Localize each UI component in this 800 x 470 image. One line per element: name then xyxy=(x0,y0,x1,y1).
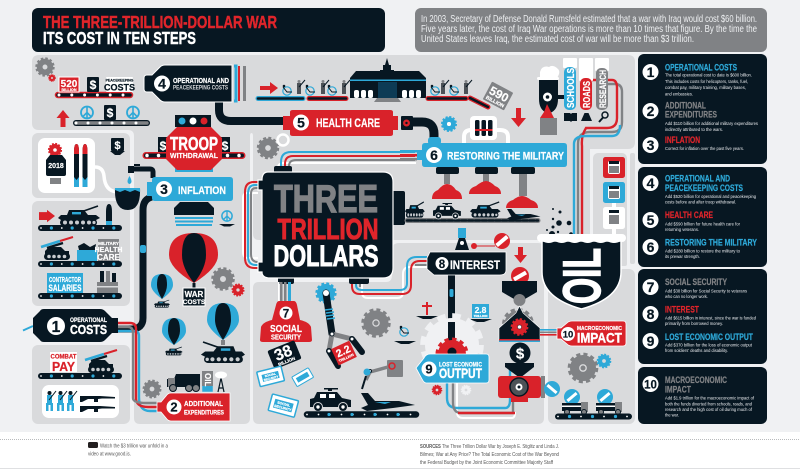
label: step 4 operational and peacekeeping costs: 4 xyxy=(158,76,166,92)
pipes: step 1 to step 2 xyxy=(118,323,160,411)
footer: sources: Bilmes; War at Any Price? The Total Economic Cost of the War Beyond xyxy=(420,452,559,458)
label: step 10 macroeconomic impact xyxy=(557,321,626,346)
label: step 7 social security xyxy=(260,301,312,342)
icon: cross on stand xyxy=(416,302,438,319)
step 8: INTEREST xyxy=(665,304,699,314)
tag: peacekeeping costs: PEACEKEEPING xyxy=(106,78,134,82)
panel: lower centre grey area xyxy=(253,243,544,424)
step 7: Add $38 billion for Social Security to veterans xyxy=(665,288,748,294)
label: step 9 lost economic output xyxy=(416,354,489,383)
footer: sources: SOURCES The Three Trillion Dollar War by Joseph E. Stiglitz and Linda J. xyxy=(420,444,559,450)
step 3: INFLATION xyxy=(665,135,700,145)
conveyor: peace symbols and dollar: $ xyxy=(107,106,114,120)
intro text block xyxy=(415,8,767,52)
pipes: central box left loop xyxy=(243,182,258,268)
label: step 3 inflation xyxy=(147,177,233,201)
step 5 xyxy=(642,210,740,232)
step 5: Add $590 billion for future health care for xyxy=(665,222,740,226)
icon: three presses under step 6 xyxy=(432,167,538,208)
conveyor: contractor salaries xyxy=(41,271,119,296)
label: step 10 macroeconomic impact: IMPACT xyxy=(577,330,623,346)
step 4: 4 xyxy=(647,175,655,191)
icon: capitol building xyxy=(350,58,426,102)
oil tank: OIL xyxy=(553,248,612,304)
title: THE THREE-TRILLION-DOLLAR WAR xyxy=(43,12,277,32)
step 3: Correct for inflation over the past five years. xyxy=(665,146,744,151)
conveyor: contractor salaries: CONTRACTOR xyxy=(49,277,81,284)
step 5: HEALTH CARE xyxy=(665,210,713,220)
icon: white stacked fund square xyxy=(603,203,625,236)
step 6: Add $280 billion to restore the military to xyxy=(665,248,740,254)
footer: video note xyxy=(88,442,168,458)
conveyor: launcher, bin and military health care: HEALTH xyxy=(95,247,122,254)
label: step 10 macroeconomic impact: 10 xyxy=(563,330,573,340)
label: step 9 lost economic output: LOST ECONOMIC xyxy=(439,362,482,368)
step 5: 5 xyxy=(647,212,655,228)
footer rule xyxy=(0,438,800,440)
pipes: central box to restoring the military xyxy=(278,152,416,172)
step 6: 6 xyxy=(647,239,655,255)
step 6: RESTORING THE MILITARY xyxy=(665,238,757,248)
icon: large blue balloon and tank xyxy=(201,303,245,363)
icons: social security tickets: SOCIAL xyxy=(277,401,291,408)
icons: social security tickets: SECURITY xyxy=(263,375,279,382)
conveyor: combat pay: COMBAT xyxy=(51,354,77,360)
label: step 7 social security: SOCIAL xyxy=(270,323,302,335)
icon: dollar on stand xyxy=(110,138,125,155)
step 2 xyxy=(642,100,759,132)
centre box: three trillion dollars: THREE xyxy=(274,178,378,221)
conveyor: combat pay: PAY xyxy=(52,359,75,374)
icon: red valve on pipe xyxy=(401,116,413,130)
icons: social security tickets: SOCIAL xyxy=(264,372,276,378)
icon: robot arm with 2.2 trillion xyxy=(317,284,362,366)
step 4: costs before and after troop withdrawal. xyxy=(665,200,736,204)
conveyor: restored military vehicles xyxy=(405,202,540,220)
tag: 520 billion: BILLION xyxy=(61,88,77,92)
icon: medium balloon and tank xyxy=(162,318,186,355)
icon: truck, oil gauge and rig: OIL xyxy=(203,373,212,386)
panel: narrow cells right of pipes xyxy=(547,153,635,266)
icon: big red balloon with war costs: WAR xyxy=(185,290,204,299)
icon: gears at lost economic output xyxy=(424,317,480,373)
icon: troop withdrawal machine: WITHDRAWAL xyxy=(170,151,218,160)
step 1: combat pay, military training, military bases, xyxy=(665,85,746,90)
step 9 xyxy=(642,332,753,353)
icon: big red balloon with war costs: COSTS xyxy=(183,299,206,306)
pipes: funding tubes to oil xyxy=(574,80,622,235)
label: step 1 operational costs: OPERATIONAL xyxy=(70,317,107,324)
footer: sources: the Federal Budget by the Joint Economic Committee Majority Staff xyxy=(420,460,553,466)
tag: dollar: $ xyxy=(90,78,97,92)
label: step 7 social security: SECURITY xyxy=(271,334,301,342)
icon: troop withdrawal machine: $ xyxy=(160,139,167,153)
conveyor: contractor salaries: SALARIES xyxy=(48,283,82,293)
panel: sidebar steps 4 to 6 xyxy=(638,167,767,267)
label: step 7 social security: 7 xyxy=(283,308,289,320)
conveyor: oil trucks and blue coins xyxy=(558,389,629,416)
panel: sidebar steps 1 to 3 xyxy=(638,54,767,164)
label: step 1 operational costs: COSTS xyxy=(70,322,107,337)
panel: sidebar step 10: 10 xyxy=(644,380,657,392)
step 1: OPERATIONAL COSTS xyxy=(665,62,737,72)
label: step 4 operational and peacekeeping costs xyxy=(144,65,246,102)
panel: sidebar step 10: MACROECONOMIC xyxy=(665,375,727,385)
panel: left column 2018 cell xyxy=(32,133,130,198)
pipes: central box to interest xyxy=(352,257,427,298)
icon: blue stacked fund square xyxy=(603,182,625,203)
step 8: Add $615 billion in interest, since the war is funded xyxy=(665,316,756,320)
icons: social security tickets xyxy=(257,366,314,417)
step 2: EXPENDITURES xyxy=(665,110,717,120)
conveyor: humvee and fighter jet xyxy=(307,388,416,414)
label: step 2 additional expenditures: EXPENDITURES xyxy=(184,410,225,416)
icon: roads tube xyxy=(579,58,593,110)
tag: 590 billion: 590 xyxy=(487,83,511,105)
step 2: Add $110 billion for additional military expenditures xyxy=(665,121,759,126)
centre box: three trillion dollars xyxy=(258,166,405,284)
label: step 9 lost economic output: OUTPUT xyxy=(439,365,482,381)
label: step 1 operational costs xyxy=(23,309,118,342)
icon: wheelchair on stand xyxy=(394,326,416,344)
icon: red ball above hopper xyxy=(511,267,529,285)
tag: 38 billion: 38 xyxy=(272,342,295,365)
footer: video note: Watch the $3 trillion war unfold in a xyxy=(100,444,168,450)
step 1: and embassies. xyxy=(665,92,693,96)
footer: sources xyxy=(420,444,559,466)
tag: 590 billion: BILLION xyxy=(484,95,505,110)
icon: gears top left xyxy=(37,59,55,81)
label: step 2 additional expenditures: 2 xyxy=(170,400,178,414)
icon: 2.8 trillion on stand: 2.8 xyxy=(475,305,487,315)
label: step 9 lost economic output: 9 xyxy=(425,362,433,376)
panel: sidebar step 10: both the funds diverted from schools, roads, and xyxy=(665,402,752,406)
label: step 10 macroeconomic impact: MACROECONOMIC xyxy=(577,326,622,332)
step 9: 9 xyxy=(647,333,655,349)
oil tank xyxy=(537,234,626,309)
panel: sidebar step 10: IMPACT xyxy=(665,384,691,394)
icon: pipe valve xyxy=(140,245,146,253)
tag: 38 billion xyxy=(267,340,302,370)
panel: sidebar step 10: the war. xyxy=(665,412,679,418)
tag: 520 billion: 520 xyxy=(61,79,78,90)
arrow: down to hopper xyxy=(514,247,527,263)
step 2: ADDITIONAL xyxy=(665,100,706,110)
icon: dollar on stand: $ xyxy=(114,140,121,152)
icon: factory robot arm xyxy=(362,360,403,389)
icon: gears lower right xyxy=(570,355,610,381)
footer bottom rule xyxy=(0,468,800,470)
step 5: returning veterans. xyxy=(665,227,699,232)
icon: troop withdrawal machine xyxy=(146,115,242,172)
panel: sidebar step 10: research and the high cost of oil during much of xyxy=(665,407,753,412)
icon: faucet and bowl xyxy=(115,164,153,210)
label: step 8 interest xyxy=(427,252,506,275)
centre box: three trillion dollars: DOLLARS xyxy=(274,240,378,273)
icon: book, road, magnifier xyxy=(564,112,608,122)
icon: roads tube: ROADS xyxy=(582,81,593,108)
label: step 3 inflation: INFLATION xyxy=(178,185,226,197)
icon: oil refinery flask xyxy=(537,66,565,135)
step 9: Add $370 billion for the loss of economic output xyxy=(665,342,753,348)
icons: social security tickets: SECURITY xyxy=(274,404,292,412)
step 4: Add $520 billion for operational and peacekeeping xyxy=(665,194,756,199)
icon: gear near step 2 xyxy=(144,381,160,397)
icon: red stacked fund square xyxy=(603,157,625,178)
conveyor: launcher, bin and military health care: MILITARY xyxy=(98,241,119,246)
icon: oil bubbles xyxy=(546,208,573,242)
conveyor: tank and missile xyxy=(39,204,119,228)
step 9: LOST ECONOMIC OUTPUT xyxy=(665,332,753,342)
step 4 xyxy=(642,174,756,204)
step 1: This includes costs for helicopters, tanks, fuel, xyxy=(665,79,748,84)
icon: 2.8 trillion on stand: TRILLION xyxy=(474,314,487,318)
icon: interest dispenser and balls xyxy=(455,228,510,250)
conveyor: launcher, bin and military health care xyxy=(41,237,122,264)
tag: 38 billion: BILLION xyxy=(277,356,296,367)
pipes: step 9 to machine xyxy=(447,367,515,418)
label: step 8 interest: INTEREST xyxy=(450,258,501,272)
step 1 xyxy=(642,62,752,96)
icon: soldiers and rifles xyxy=(42,385,119,418)
icon: big red balloon with war costs xyxy=(169,233,218,306)
label: step 3 inflation: 3 xyxy=(160,181,168,197)
step 2: indirectly attributed to the wars. xyxy=(665,127,723,132)
conveyor: veterans right of capitol xyxy=(428,80,488,107)
label: step 4 operational and peacekeeping costs: PEACEKEEPING COSTS xyxy=(173,86,228,92)
icon: hopper and macroeconomic machine xyxy=(498,281,545,402)
conveyor: wounded veterans xyxy=(258,80,350,98)
centre box: three trillion dollars: TRILLION xyxy=(278,214,378,246)
icon: schools tube: SCHOOLS xyxy=(566,68,577,108)
label: step 2 additional expenditures: ADDITIONAL xyxy=(184,399,223,408)
step 3 xyxy=(642,135,744,153)
title xyxy=(32,8,385,52)
pipe: step 4 to step 5 xyxy=(219,100,290,121)
step 1: 1 xyxy=(647,64,655,80)
tag: 590 billion xyxy=(483,82,513,110)
arrow: up xyxy=(56,110,70,127)
step 8: 8 xyxy=(647,306,655,322)
icon: robot arm with 2.2 trillion: 2.2 xyxy=(334,343,353,360)
step 6 xyxy=(642,238,757,259)
arrow: right to veterans conveyor xyxy=(260,82,278,94)
pipes: central box to step 7 xyxy=(278,282,291,302)
conveyor: peacekeeping costs xyxy=(58,77,135,95)
step 2: 2 xyxy=(647,103,655,119)
step 1: The total operational cost to date is $600 billion. xyxy=(665,72,752,78)
step 3: 3 xyxy=(647,137,655,153)
icon: press below inflation xyxy=(174,202,214,226)
arrow: down to restoring the military xyxy=(511,108,526,127)
footer: video note: video at www.good.is. xyxy=(88,452,131,458)
step 8: primarily from borrowed money. xyxy=(665,321,723,326)
icon: large grey gear xyxy=(363,310,389,336)
icon: troop withdrawal machine: $ xyxy=(222,139,229,153)
icon: research tube: RESEARCH xyxy=(598,70,609,108)
icon: truck, oil gauge and rig xyxy=(167,371,227,392)
pipe: inflation down to step 1 xyxy=(116,197,152,329)
label: step 2 additional expenditures xyxy=(157,393,230,421)
panel: main upper grey area xyxy=(32,55,635,424)
pipes: machine to impact xyxy=(540,329,558,336)
label: step 5 health care: 5 xyxy=(297,114,305,130)
icon: 2018 cost capsule and bullets xyxy=(38,138,117,193)
icon: troop withdrawal machine: TROOP xyxy=(170,134,218,154)
pipe: health care to restoring the military xyxy=(404,122,434,140)
tag: peacekeeping costs: COSTS xyxy=(104,82,135,92)
icon: blue gear near restoring label xyxy=(442,117,456,131)
pipe: interest down to output xyxy=(448,273,455,335)
tag: 520 billion xyxy=(59,77,79,92)
panel: sidebar step 10 xyxy=(638,367,767,424)
panel: sidebar steps 7 to 9 xyxy=(638,269,767,364)
step 9: from soldiers' deaths and disability. xyxy=(665,348,728,353)
conveyor: peace symbols and dollar xyxy=(76,105,147,123)
step 8 xyxy=(642,304,756,326)
icon: gears by balloon xyxy=(213,269,244,296)
label: step 1 operational costs: 1 xyxy=(52,319,61,336)
panel: lower right grey area xyxy=(548,269,635,424)
conveyor: launcher, bin and military health care: CARE xyxy=(97,253,120,262)
icon: 2018 cost capsule and bullets: 2018 xyxy=(48,163,64,170)
label: step 5 health care: HEALTH CARE xyxy=(316,118,380,130)
step 7: who can no longer work. xyxy=(665,294,708,299)
pipes: into step 6 xyxy=(400,150,417,160)
label: step 4 operational and peacekeeping costs: OPERATIONAL AND xyxy=(173,78,229,85)
label: step 5 health care xyxy=(283,110,398,136)
conveyor: combat pay xyxy=(41,350,119,376)
panel: left column combat pay cell xyxy=(32,345,130,424)
icon: hopper and macroeconomic machine: $ xyxy=(516,346,525,362)
panel: left column conveyors cell xyxy=(32,201,130,306)
label: step 6 restoring the military: RESTORING THE MILITARY xyxy=(447,150,565,162)
panel: sidebar step 10: Add $1.9 trillion for the macroeconomic impact of xyxy=(665,396,755,400)
tag: peacekeeping costs xyxy=(104,77,135,92)
icon: peace symbol on stand xyxy=(219,211,235,226)
icon: bullets on white stand xyxy=(464,116,508,144)
label: step 6 restoring the military: 6 xyxy=(430,147,438,163)
step 7: SOCIAL SECURITY xyxy=(665,277,727,287)
intro text block: United States leaves Iraq, the estimated cost of war will be more than $3 trillion. xyxy=(421,34,694,45)
step 4: OPERATIONAL AND xyxy=(665,174,730,184)
icon: small balloon and tank xyxy=(151,274,173,308)
icon: blue coin xyxy=(544,381,560,397)
icon: small gears under output xyxy=(432,385,471,395)
step 4: PEACEKEEPING COSTS xyxy=(665,183,743,193)
title: ITS COST IN TEN STEPS xyxy=(43,28,196,48)
label: step 6 restoring the military xyxy=(417,137,567,167)
label: step 8 interest: 8 xyxy=(439,259,446,271)
step 6: its prewar strength. xyxy=(665,254,700,259)
step 7 xyxy=(642,277,748,299)
icon: 2.8 trillion on stand xyxy=(469,304,492,322)
step 7: 7 xyxy=(647,279,655,295)
icon: robot arm with 2.2 trillion: TRILLION xyxy=(338,353,355,363)
icon: gears above central box xyxy=(258,134,288,158)
